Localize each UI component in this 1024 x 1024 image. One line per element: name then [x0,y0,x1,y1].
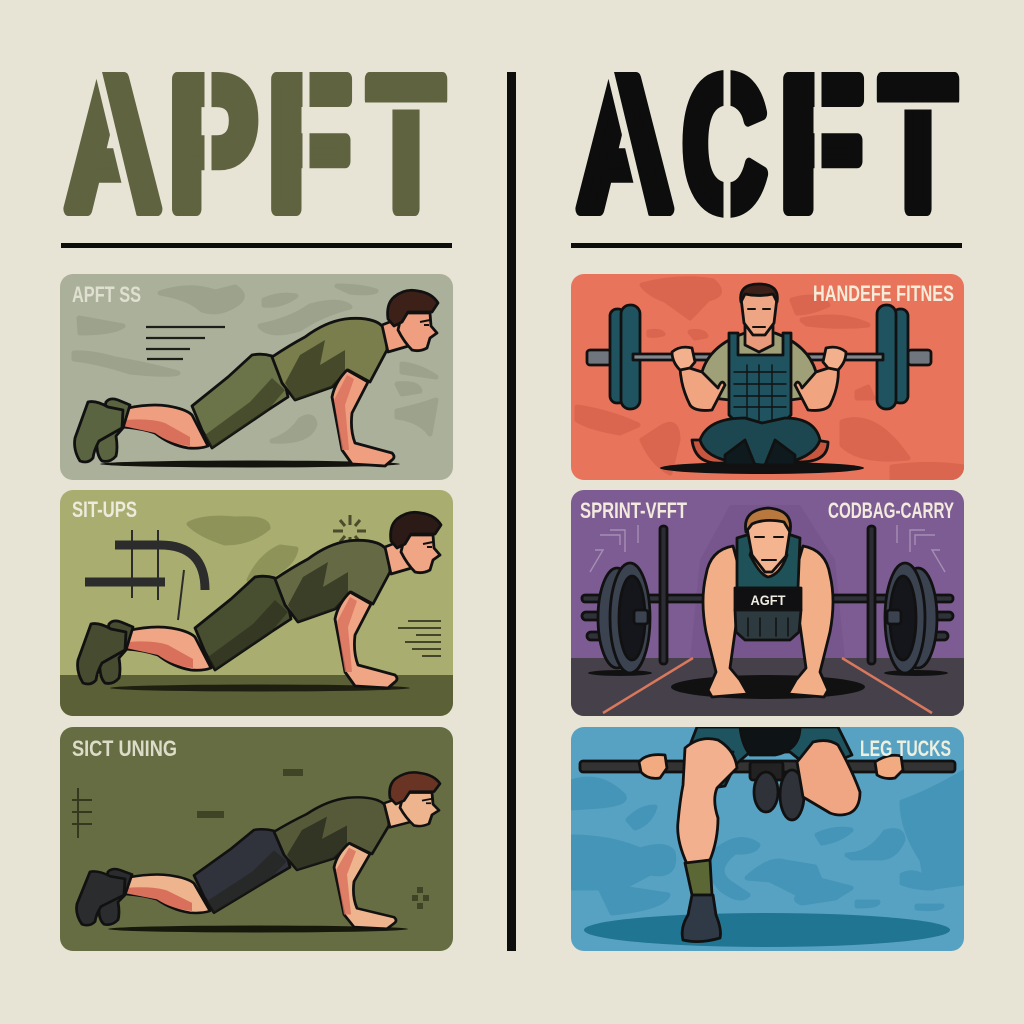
figure: push-up [78,512,441,688]
label: LEG TUCKS [860,736,951,761]
title: ACFT: F [779,39,864,250]
figure: athlete with ACFT vest [703,508,833,697]
ground shadow [584,913,950,947]
figure: seated lifter with vest [672,284,846,465]
camouflage [571,772,964,913]
title: ACFT: A [577,39,673,250]
figure: hanging legs [639,727,903,942]
camouflage [189,518,296,583]
panel: ACFT deadlift [571,274,964,480]
camouflage [577,279,964,480]
title: APFT: A [65,39,161,250]
label: SICT UNING [72,736,177,761]
panel: sit-ups [60,490,453,716]
title stencil gaps: APFT [97,66,452,220]
title: ACFT [577,39,956,250]
ground shadow [100,460,400,468]
figure: push-up [77,772,440,929]
marks [197,769,429,909]
title: ACFT: T [880,39,956,250]
equipment: pull-up bar icon [85,530,205,620]
label: SIT-UPS [72,497,137,522]
ground shadows [588,670,948,699]
floor lines [603,658,932,713]
barbell [582,526,953,664]
center divider [507,72,516,951]
ground shadow [108,926,408,932]
figure: knee push-up [75,290,438,466]
weight plates [598,563,937,673]
title: APFT: T [368,39,444,250]
barbell [587,305,931,409]
panel: ACFT hand-release push-up [571,490,964,716]
ground shadow [110,684,410,692]
panel: ACFT leg tucks [571,727,964,951]
title: ACFT: C [682,39,767,250]
labels: SPRINT-VFFT [580,498,687,523]
vest label: AGFT [750,592,786,608]
panel: third push-up [60,727,453,951]
pull-up bar [580,761,955,772]
faint wall marks [590,525,945,572]
title: APFT [65,39,444,250]
title stencil gaps: ACFT [609,66,964,220]
heading rules [61,243,962,248]
label: HANDEFE FITNES [813,281,954,306]
panel: ACFT hand-release push-up: CODBAG-CARRY [828,498,954,523]
wall shading [690,505,845,660]
burst mark [333,515,366,542]
title: APFT: F [267,39,352,250]
hash mark [72,788,92,838]
label: APFT SS [72,282,141,307]
camouflage [74,286,436,441]
title: APFT: P [168,39,258,250]
speed lines [398,621,441,656]
panel: APFT push-ups [60,274,453,480]
floor [571,658,964,716]
ground shadow [660,462,864,474]
speed lines [146,327,225,359]
floor [60,675,453,716]
